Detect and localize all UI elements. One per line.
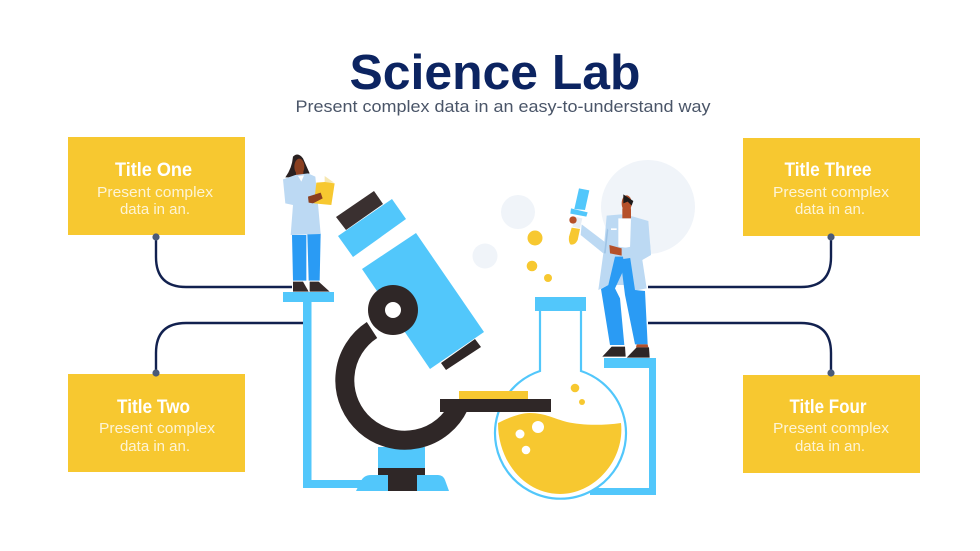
text: title one body: data in an. [120, 201, 190, 218]
text: title two body: Present complex [99, 420, 216, 437]
panel: title one [68, 137, 245, 235]
flask liquid [498, 413, 621, 494]
flask droplets [571, 384, 585, 405]
microscope stage [440, 391, 551, 412]
microscope [336, 191, 551, 491]
text: title three body: data in an. [795, 201, 865, 218]
dropper [569, 188, 589, 245]
text: title two body: data in an. [120, 438, 190, 455]
microscope base [356, 447, 449, 491]
panel: title two [68, 374, 245, 472]
scientist: man with dropper [569, 188, 651, 358]
microscope tube [362, 233, 484, 369]
panel: title four [743, 375, 920, 473]
connector: title one [152, 233, 292, 287]
flask [495, 297, 626, 499]
title: Science Lab [350, 46, 640, 100]
microscope knob [368, 285, 418, 335]
text: title three body: Present complex [773, 184, 890, 201]
microscope objective [441, 339, 481, 370]
heading: title two: Title Two [117, 397, 190, 418]
text: title one body: Present complex [97, 184, 214, 201]
connector: title two [152, 323, 303, 377]
microscope arm [345, 330, 459, 440]
left blue pipe and platform [283, 292, 363, 488]
subtitle: Present complex data in an easy-to-understand way [296, 97, 711, 116]
heading: title three: Title Three [784, 160, 872, 181]
heading: title one: Title One [115, 160, 192, 181]
text: title four body: data in an. [795, 438, 865, 455]
heading: title four: Title Four [790, 397, 867, 418]
decorative pale circles [472, 160, 695, 268]
text: title four body: Present complex [773, 420, 890, 437]
yellow droplets [527, 230, 552, 282]
microscope eyepiece [336, 191, 406, 257]
connector: title three [648, 233, 835, 287]
connector: title four [648, 323, 835, 377]
right blue pipe and platform [590, 358, 656, 495]
panel: title three [743, 138, 920, 236]
scientist: woman with book [283, 155, 335, 292]
liquid bubbles [516, 421, 544, 454]
